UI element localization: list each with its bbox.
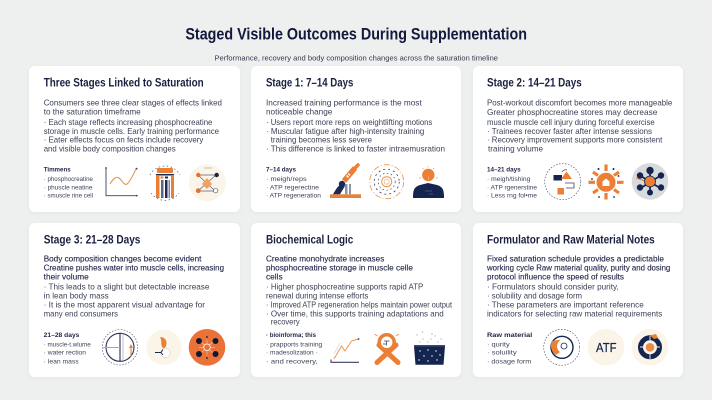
panel: stage 2 bbox=[473, 66, 683, 212]
icon: column building bbox=[150, 166, 180, 200]
heading: stage 3: Stage 3: 21–28 Days bbox=[44, 235, 140, 247]
text block: stage 1: training becomes less severe bbox=[271, 136, 372, 145]
subtitle: Performance, recovery and body composition changes across the saturation timeline bbox=[214, 53, 498, 62]
icon: rising line chart bbox=[331, 338, 359, 362]
icon: ATF badge bbox=[588, 329, 624, 366]
legend list: biochemical logic: · bioinforma; this bbox=[266, 332, 316, 339]
legend list: stage 2: · ATP rgenerstine bbox=[487, 184, 537, 191]
icon: microscope bbox=[330, 165, 361, 198]
text block: biochemical logic: renewal during intense efforts bbox=[266, 291, 368, 300]
legend list: stage 3: 21–28 days bbox=[44, 332, 80, 339]
text block: three stages: to the saturation timeframe bbox=[44, 107, 141, 116]
text block: three stages: and visible body composition changes bbox=[44, 145, 176, 154]
text block: stage 1: · Users report more reps on weightlifting motions bbox=[266, 118, 432, 127]
legend list: stage 1: · ATP regerectine bbox=[266, 184, 319, 191]
text block: biochemical logic: cells bbox=[266, 272, 283, 281]
text block: stage 2 bbox=[487, 98, 673, 154]
text block: biochemical logic: Creatine monohydrate increases bbox=[266, 255, 384, 264]
heading: biochemical logic: Biochemical Logic bbox=[266, 235, 354, 247]
legend list: biochemical logic: · prapports training bbox=[266, 341, 323, 348]
text block: formulator notes: protocol influence the speed of results bbox=[487, 272, 624, 281]
text block: formulator notes: · These parameters are important reference bbox=[487, 300, 644, 309]
text block: three stages bbox=[44, 98, 222, 154]
text block: stage 3: their volume bbox=[44, 272, 89, 281]
text block: stage 1: noticeable change bbox=[266, 107, 333, 116]
text block: stage 3: · It is the most apparent visual advantage for bbox=[44, 300, 205, 309]
text block: biochemical logic: phosphocreatine storage in muscle celle bbox=[266, 264, 413, 273]
panel: biochemical logic bbox=[251, 223, 461, 377]
text block: biochemical logic bbox=[266, 255, 453, 327]
legend list: stage 2: · meigh/tishing bbox=[487, 176, 531, 183]
legend list: three stages: · phosphocreatine bbox=[44, 176, 93, 183]
text block: formulator notes: working cycle Raw material quality, purity and dosing bbox=[486, 264, 671, 273]
legend list: three stages: · phuscle neatine bbox=[44, 184, 93, 191]
panel: stage 1 bbox=[251, 66, 461, 212]
legend list: stage 2: · Less rng fol•me bbox=[487, 193, 537, 200]
icon: line chart bbox=[105, 167, 138, 197]
text block: stage 2: · Recovery improvement supports more consistent bbox=[487, 136, 663, 145]
legend list: formulator notes: · qurity bbox=[487, 341, 511, 348]
text block: three stages: · Eater effects focus on fects include recovery bbox=[44, 136, 204, 145]
legend list: formulator notes bbox=[487, 332, 533, 365]
icon: network on cream bbox=[189, 164, 226, 201]
icon: cream circle with drop bbox=[146, 330, 182, 365]
icon: person with glowing head bbox=[413, 166, 444, 198]
text block: three stages: storage in muscle cells. Early training performance bbox=[44, 127, 219, 136]
text block: biochemical logic: recovery bbox=[271, 318, 301, 327]
text block: stage 2: · Trainees recover faster after intense sessions bbox=[487, 127, 652, 136]
legend list: stage 3: · muscle-t.wlume bbox=[44, 341, 91, 348]
text block: stage 2: muscle muscle cell injury during forceful exercise bbox=[487, 118, 655, 127]
text block: stage 1 bbox=[266, 98, 445, 154]
legend list: stage 3: · water rection bbox=[44, 350, 86, 357]
legend list: stage 2 bbox=[487, 167, 537, 200]
text block: three stages: Consumers see three clear stages of effects linked bbox=[44, 98, 222, 107]
legend list: stage 1 bbox=[266, 167, 321, 200]
icon: shapes in dashed circle bbox=[545, 164, 581, 200]
legend list: stage 1: 7–14 days bbox=[266, 167, 296, 174]
legend list: stage 3 bbox=[44, 332, 91, 365]
heading: three stages: Three Stages Linked to Saturation bbox=[44, 78, 204, 90]
legend list: stage 3: · lean mass bbox=[44, 358, 79, 365]
text block: stage 1: · Muscular fatigue after high-intensity training bbox=[266, 127, 425, 136]
text block: stage 3: Body composition changes become evident bbox=[44, 255, 202, 264]
legend list: biochemical logic bbox=[266, 332, 323, 365]
text block: formulator notes: · solubility and dosage form bbox=[487, 291, 582, 300]
heading: stage 1: Stage 1: 7–14 Days bbox=[266, 78, 353, 90]
icon: concentric rings bbox=[370, 165, 404, 199]
text block: stage 3 bbox=[44, 255, 224, 318]
legend list: stage 2: 14–21 days bbox=[487, 167, 521, 174]
panel: three stages bbox=[29, 66, 240, 212]
legend list: formulator notes: Raw material bbox=[487, 332, 533, 339]
legend list: stage 1: · ATP regeneration bbox=[266, 193, 321, 200]
text block: biochemical logic: · Improved ATP regeneration helps maintain power output bbox=[266, 300, 453, 309]
text block: stage 3: · This leads to a slight but detectable increase bbox=[44, 283, 210, 292]
text block: stage 1: · This difference is linked to faster intraemusration bbox=[266, 145, 445, 154]
icon: network on grey bbox=[632, 163, 668, 200]
text block: stage 2: training volume bbox=[488, 145, 543, 154]
legend list: three stages bbox=[44, 167, 94, 200]
text block: formulator notes bbox=[486, 255, 671, 318]
icon: beaker with particles bbox=[414, 331, 445, 365]
legend list: three stages: Timmens bbox=[44, 167, 71, 174]
text block: formulator notes: Fixed saturation schedule provides a predictable bbox=[487, 255, 664, 264]
text block: stage 2: Greater phosphocreatine stores may decrease bbox=[487, 108, 658, 117]
text block: stage 3: many end consumers bbox=[44, 309, 118, 318]
panel: formulator notes bbox=[473, 223, 683, 377]
icon: orange ribbon bbox=[374, 334, 399, 362]
icon: orange sun bbox=[588, 164, 624, 200]
icon: dial circle bbox=[102, 330, 138, 365]
legend list: formulator notes: · soluility bbox=[487, 350, 518, 357]
legend list: formulator notes: · dosage form bbox=[487, 358, 531, 365]
text block: formulator notes: indicators for selecting raw material requirements bbox=[487, 309, 662, 318]
icon: orange circle with nodes bbox=[189, 329, 225, 366]
heading: formulator notes: Formulator and Raw Material Notes bbox=[487, 235, 655, 247]
text block: biochemical logic: · Higher phosphocreatine supports rapid ATP bbox=[266, 283, 424, 292]
text block: three stages: · Each stage reflects increasing phosphocreatine bbox=[44, 118, 213, 127]
legend list: three stages: · smuscle rine cell bbox=[44, 193, 94, 200]
text block: biochemical logic: · Over time, this supports training adaptations and bbox=[266, 309, 444, 318]
text block: formulator notes: · Formulators should consider purity, bbox=[487, 283, 619, 292]
heading: stage 2: Stage 2: 14–21 Days bbox=[487, 78, 582, 90]
panel: stage 3 bbox=[29, 223, 240, 377]
icon: navy ring on cream bbox=[632, 329, 668, 366]
text block: stage 3: Creatine pushes water into muscle cells, increasing bbox=[44, 264, 224, 273]
legend list: stage 1: · meigh/reps bbox=[266, 176, 308, 183]
text block: stage 3: in lean body mass bbox=[44, 291, 109, 300]
text block: stage 2: Post-workout discomfort becomes more manageable bbox=[487, 98, 673, 107]
title: Staged Visible Outcomes During Supplementation bbox=[185, 24, 527, 44]
icon: ATF badge: ATF bbox=[596, 341, 617, 355]
icon: pie ring in dashed circle bbox=[544, 329, 580, 365]
text block: stage 1: Increased training performance is the most bbox=[266, 98, 422, 107]
legend list: biochemical logic: · madesolization · bbox=[266, 350, 318, 357]
legend list: biochemical logic: · and recovery, bbox=[266, 358, 318, 365]
